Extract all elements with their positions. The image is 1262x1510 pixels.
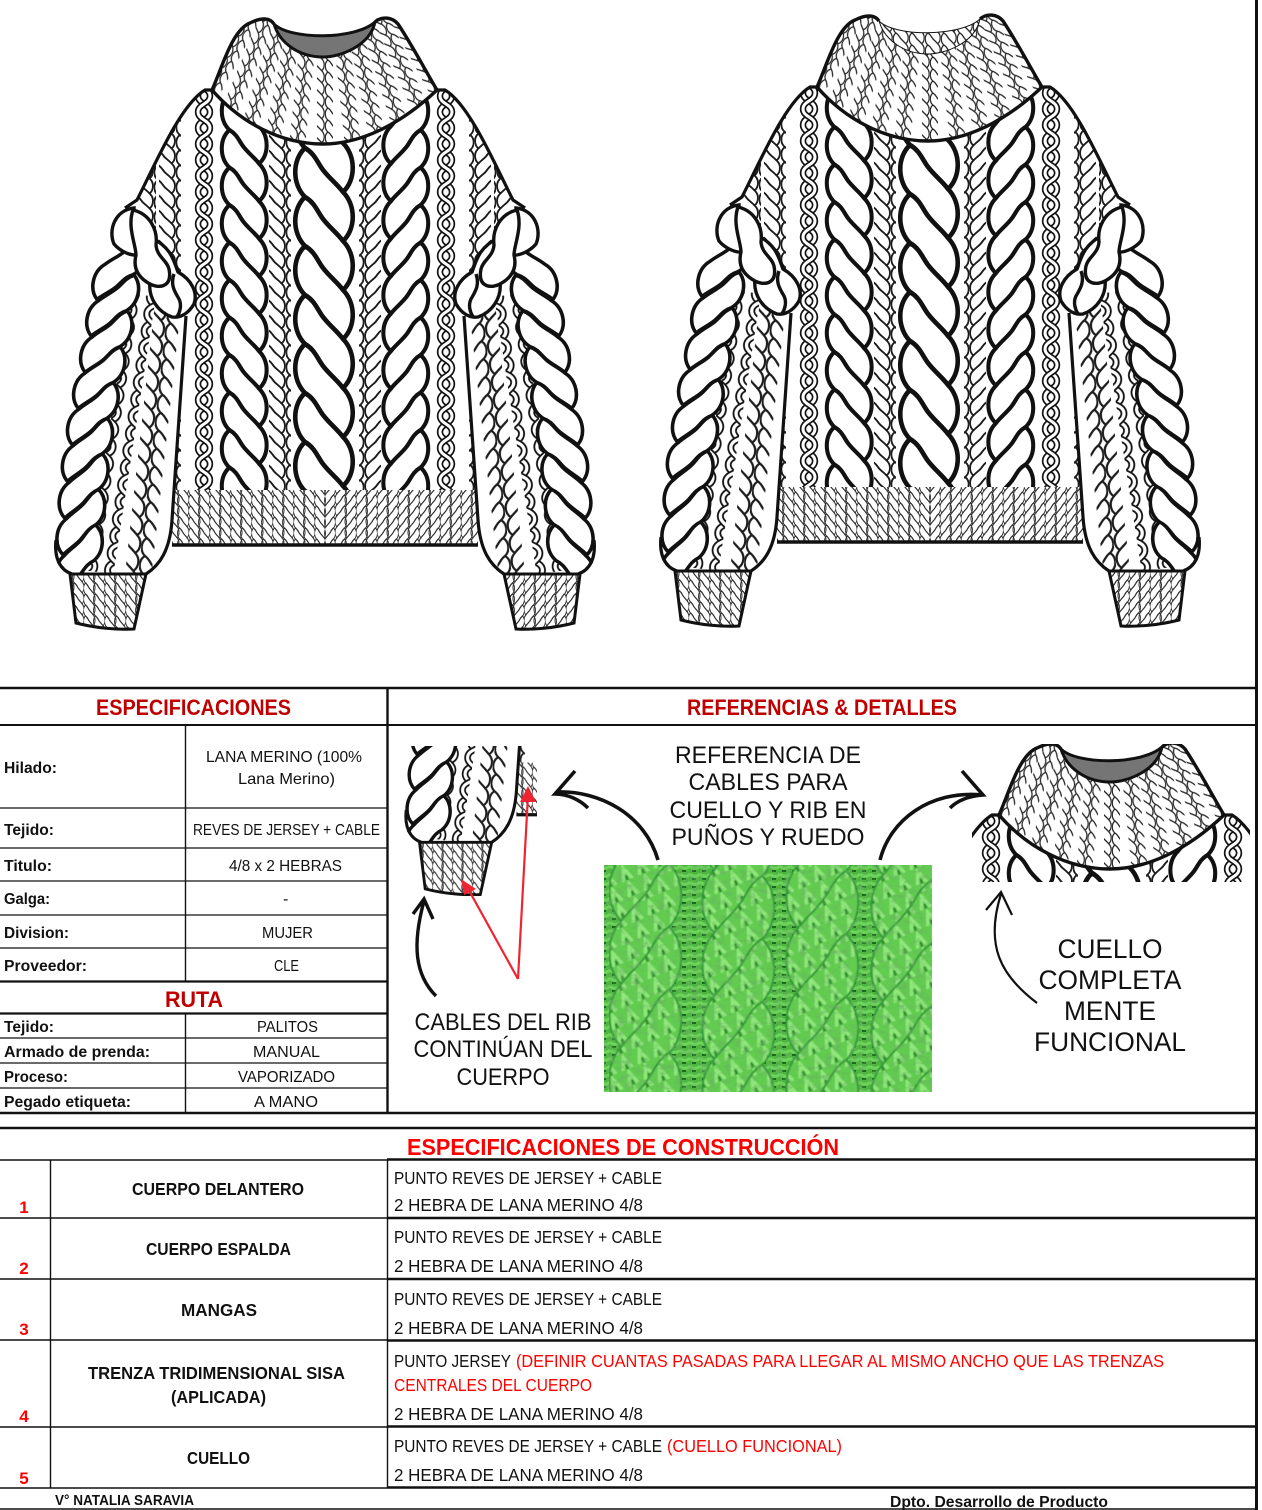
note: cuello funcional: FUNCIONAL (1034, 1027, 1186, 1057)
row numbers: 3 (19, 1320, 29, 1339)
table: especificaciones: CLE (274, 958, 299, 975)
table: especificaciones: - (283, 891, 288, 908)
garment part names: TRENZA TRIDIMENSIONAL SISA (88, 1363, 345, 1383)
construction descriptions: (DEFINIR CUANTAS PASADAS PARA LLEGAR AL MISMO ANCHO QUE LAS TRENZAS (516, 1351, 1164, 1371)
row numbers: 2 (19, 1259, 29, 1278)
table: especificaciones: Lana Merino) (238, 771, 335, 788)
note: cables del rib: CONTINÚAN DEL (414, 1036, 592, 1063)
garment part names: MANGAS (181, 1300, 257, 1320)
heading: especificaciones: ESPECIFICACIONES (96, 695, 291, 720)
table: ruta: A MANO (254, 1094, 318, 1111)
arrow: reference to collar (880, 771, 983, 860)
illustration: sweater front with grey neck opening (53, 0, 597, 629)
table: especificaciones: MUJER (262, 925, 313, 942)
table: ruta: Tejido: (4, 1019, 54, 1036)
garment part names: (APLICADA) (171, 1387, 266, 1407)
note: cables del rib (414, 1009, 592, 1091)
detail image: cuff close-up (404, 746, 537, 896)
reference text: cables para cuello y rib (670, 742, 866, 851)
detail image: collar close-up (972, 744, 1250, 882)
table: ruta: PALITOS (257, 1019, 318, 1036)
garment part names (88, 1179, 345, 1468)
construction descriptions: 2 HEBRA DE LANA MERINO 4/8 (394, 1404, 643, 1424)
heading: especificaciones de construccion: ESPECIFICACIONES DE CONSTRUCCIÓN (407, 1133, 839, 1160)
construction descriptions: 2 HEBRA DE LANA MERINO 4/8 (394, 1318, 643, 1338)
garment part names: CUERPO DELANTERO (132, 1179, 304, 1199)
heading: referencias y detalles: REFERENCIAS & DETALLES (687, 695, 957, 720)
note: cables del rib: CUERPO (456, 1064, 550, 1091)
image: green cable knit swatch (604, 865, 932, 1092)
table: especificaciones: REVES DE JERSEY + CABLE (193, 822, 380, 839)
table: especificaciones: Hilado: (4, 760, 57, 777)
table: especificaciones: LANA MERINO (100% (206, 749, 362, 766)
table: ruta: Proceso: (4, 1069, 68, 1086)
note: cuello funcional: CUELLO (1058, 934, 1162, 964)
garment part names: CUERPO ESPALDA (146, 1239, 291, 1259)
construction descriptions: PUNTO REVES DE JERSEY + CABLE (394, 1168, 662, 1188)
table: especificaciones: Division: (4, 925, 69, 942)
construction descriptions: PUNTO REVES DE JERSEY + CABLE (394, 1289, 662, 1309)
construction descriptions: 2 HEBRA DE LANA MERINO 4/8 (394, 1256, 643, 1276)
note: cuello funcional: COMPLETA (1038, 965, 1182, 995)
arrow: reference to cuff (555, 771, 658, 860)
row numbers: 5 (19, 1469, 29, 1488)
garment part names: CUELLO (187, 1448, 250, 1468)
table: especificaciones: Galga: (4, 891, 50, 908)
table: ruta: VAPORIZADO (238, 1069, 335, 1086)
construction descriptions: 2 HEBRA DE LANA MERINO 4/8 (394, 1465, 643, 1485)
arrow: up to collar (986, 892, 1037, 1003)
reference text: cables para cuello y rib: CUELLO Y RIB EN (670, 797, 866, 824)
construction descriptions: 2 HEBRA DE LANA MERINO 4/8 (394, 1195, 643, 1215)
construction descriptions (394, 1168, 1164, 1485)
note: cuello funcional: MENTE (1064, 996, 1156, 1026)
reference text: cables para cuello y rib: CABLES PARA (688, 769, 848, 796)
table: especificaciones (4, 749, 380, 975)
construction descriptions: PUNTO JERSEY (394, 1351, 511, 1371)
row numbers: 1 (19, 1198, 29, 1217)
row numbers: 4 (19, 1407, 29, 1426)
table: especificaciones: Titulo: (4, 858, 52, 875)
illustration: sweater back with closed collar (658, 0, 1202, 626)
construction descriptions: PUNTO REVES DE JERSEY + CABLE (394, 1227, 662, 1247)
arrow: up to cuff (413, 899, 436, 996)
table: especificaciones: 4/8 x 2 HEBRAS (229, 858, 342, 875)
table: especificaciones: Proveedor: (4, 958, 87, 975)
table: ruta: Pegado etiqueta: (4, 1094, 131, 1111)
table: especificaciones: Tejido: (4, 822, 54, 839)
table: ruta (4, 1019, 335, 1111)
reference text: cables para cuello y rib: REFERENCIA DE (675, 742, 861, 769)
construction descriptions: (CUELLO FUNCIONAL) (667, 1436, 842, 1456)
construction descriptions: PUNTO REVES DE JERSEY + CABLE (394, 1436, 662, 1456)
note: cuello funcional (1034, 934, 1186, 1057)
construction descriptions: CENTRALES DEL CUERPO (394, 1375, 592, 1395)
row numbers (19, 1198, 29, 1488)
heading: ruta: RUTA (165, 987, 223, 1012)
table: ruta: MANUAL (253, 1044, 320, 1061)
reference text: cables para cuello y rib: PUÑOS Y RUEDO (672, 824, 864, 851)
footer: approval: V° NATALIA SARAVIA (55, 1493, 194, 1509)
note: cables del rib: CABLES DEL RIB (414, 1009, 592, 1036)
table: ruta: Armado de prenda: (4, 1044, 150, 1061)
red arrows: rib cables (461, 786, 536, 979)
